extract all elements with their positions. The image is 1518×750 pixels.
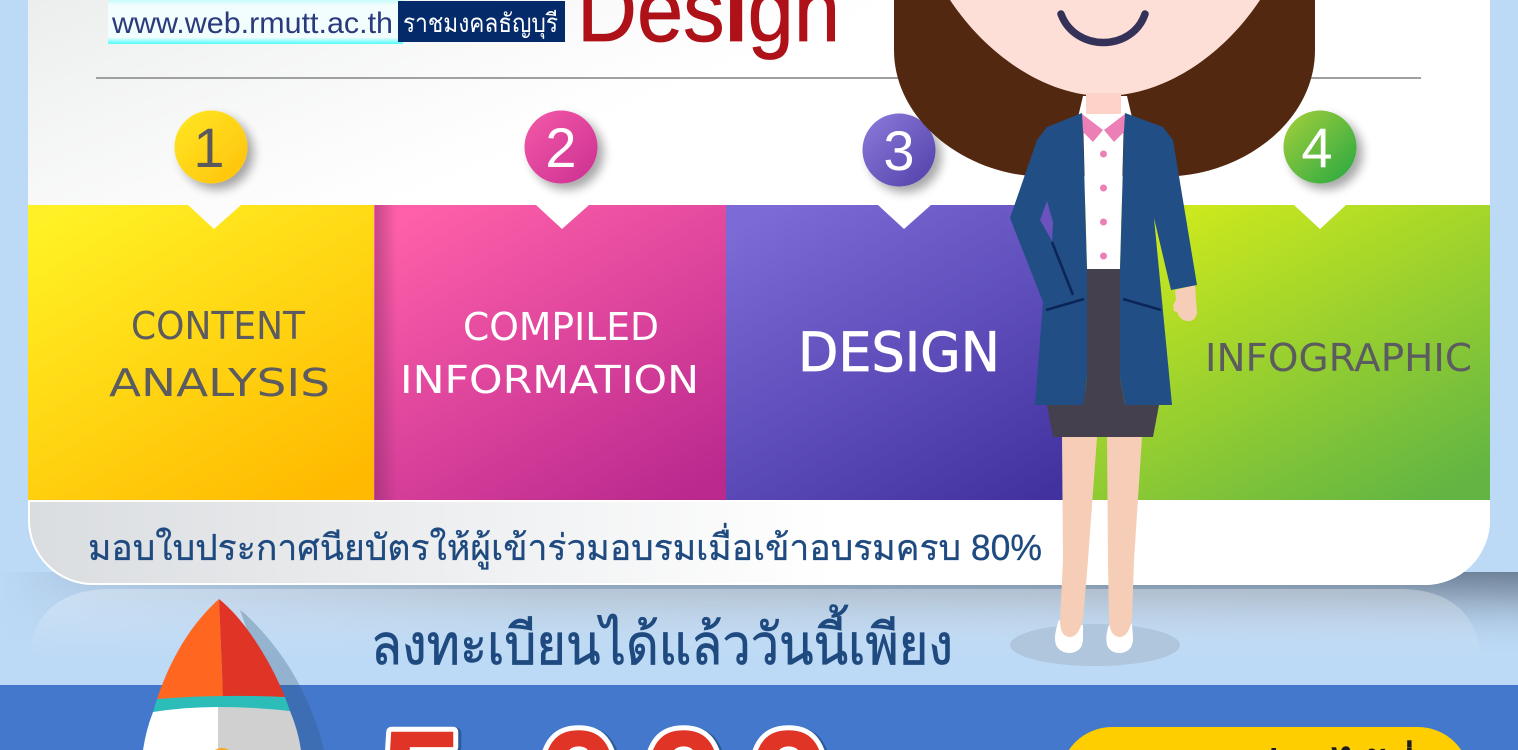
porthole: [209, 748, 235, 750]
floor shadow: [1010, 624, 1180, 666]
collar: [1082, 114, 1125, 142]
number badge 4: [1284, 110, 1356, 184]
blazer left: [1010, 113, 1087, 405]
blue footer band: [0, 685, 1518, 750]
label line 2: INFORMATION: [400, 358, 699, 402]
panel: step 3 design: [726, 114, 1085, 500]
card drop shadow band: [38, 572, 1518, 632]
panel: step 4 infographic: [1085, 110, 1490, 500]
shirt buttons: [1100, 150, 1107, 260]
number badge 2: 2: [545, 116, 577, 179]
number badge 3: 3: [883, 119, 915, 182]
label: COMPILED: [463, 305, 659, 349]
icon: sailboat: [143, 599, 324, 750]
character: woman in blue blazer: [894, 0, 1315, 666]
glossy lower panel: [30, 589, 1480, 660]
left shoe: [1055, 620, 1083, 653]
purple block: [726, 205, 1085, 500]
pink block: [374, 205, 726, 500]
price: [380, 699, 833, 750]
boat shadow: [240, 610, 324, 750]
right leg: [1107, 437, 1142, 637]
sail right: [219, 599, 285, 697]
website badge: [108, 0, 565, 44]
hair: [894, 0, 1315, 176]
skirt: [1047, 269, 1159, 437]
panel: main white card: [28, 0, 1490, 585]
university name: ราชมงคลธัญบุรี: [403, 8, 558, 39]
pocket lines: [1046, 242, 1161, 310]
url bar: [108, 0, 403, 44]
hull left: [143, 707, 218, 750]
label: CONTENT: [131, 304, 306, 348]
registration heading: ลงทะเบียนได้แล้ววันนี้เพียง: [371, 605, 953, 676]
url text: www.web.rmutt.ac.th: [111, 7, 393, 40]
green block: [1085, 205, 1490, 500]
panel: step 1 content analysis: [28, 110, 374, 500]
yellow call to action: [1060, 727, 1470, 750]
right shoe: [1106, 620, 1133, 653]
divider: [96, 77, 1421, 79]
neck gap: [1075, 96, 1135, 130]
hand: [1173, 285, 1197, 321]
label line 2: ANALYSIS: [109, 361, 330, 405]
certificate text: มอบใบประกาศนียบัตรให้ผู้เข้าร่วมอบรมเมื่อเข้าอบรมครบ 80%: [88, 523, 1042, 570]
number badge 1: 1: [193, 116, 225, 179]
face: [950, 0, 1260, 96]
arm gap: [1040, 201, 1053, 241]
sail left: [157, 599, 223, 699]
neck: [1086, 93, 1121, 130]
navy name box: [398, 1, 565, 42]
pill: [1060, 727, 1470, 750]
yellow block: [28, 205, 374, 500]
blazer right: [1120, 113, 1197, 405]
label: DESIGN: [798, 321, 1000, 384]
hull right: [218, 707, 301, 750]
number badge 3: [862, 114, 936, 186]
panel: step 2 compiled information: [374, 110, 726, 500]
number badge 4: 4: [1301, 116, 1333, 179]
number badge 1: [174, 110, 248, 184]
label: INFOGRAPHIC: [1205, 336, 1472, 380]
certificate strip background: [29, 501, 1489, 584]
left leg: [1060, 437, 1097, 637]
shirt: [1083, 114, 1124, 269]
left shade: [375, 205, 397, 500]
smile: [1061, 14, 1145, 42]
number badge 2: [524, 110, 598, 184]
teal band: [153, 696, 290, 712]
